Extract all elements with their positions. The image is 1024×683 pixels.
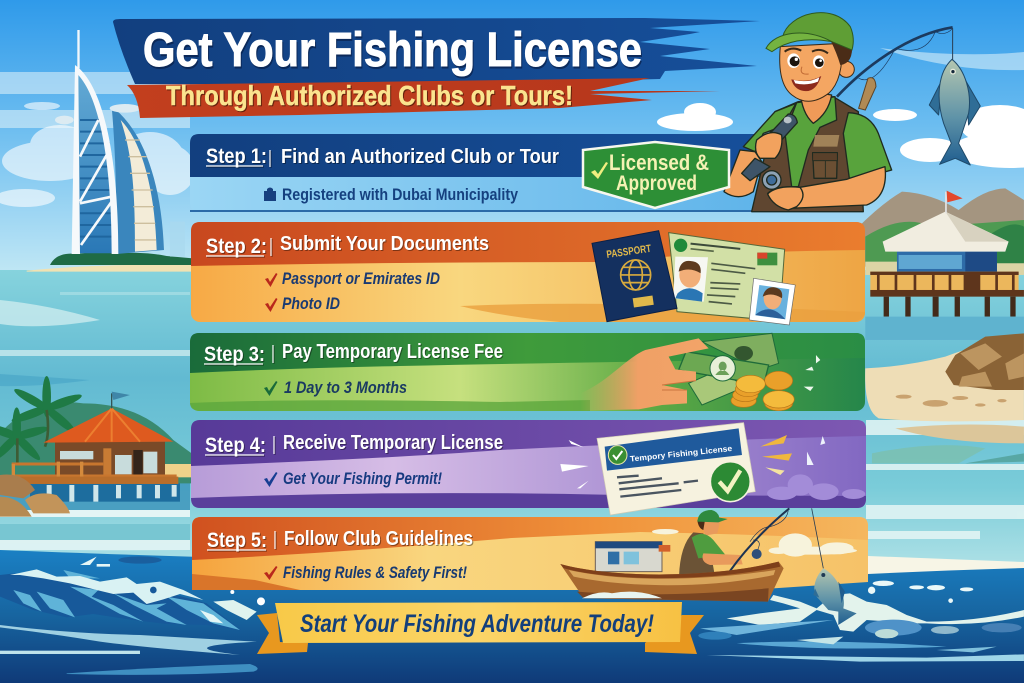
panel: step 3 xyxy=(190,333,865,411)
illustration: waves on left xyxy=(0,543,265,675)
fishing rod xyxy=(837,27,953,110)
small photo xyxy=(749,278,795,325)
panel: step 4 xyxy=(191,420,866,508)
illustration: left pier hut with palms xyxy=(0,376,192,517)
step 2 details: Photo ID xyxy=(282,294,340,313)
hanging fish xyxy=(929,59,980,165)
badge: licensed and approved xyxy=(583,142,729,208)
step 4 heading: Receive Temporary License xyxy=(283,432,503,454)
step 2 heading: Submit Your Documents xyxy=(280,233,489,255)
icon: passport and ID cards xyxy=(592,231,795,325)
background: sky xyxy=(0,0,1024,280)
passport: PASSPORT xyxy=(606,243,652,261)
subtitle: Through Authorized Clubs or Tours! xyxy=(166,80,573,111)
step 2 details xyxy=(265,269,440,313)
panel: step 1 xyxy=(190,134,862,212)
step 5 heading xyxy=(207,528,473,552)
step 3 heading: Step 3: xyxy=(204,343,265,366)
banner: call to action ribbon xyxy=(257,602,704,654)
step 3 heading: Pay Temporary License Fee xyxy=(282,341,503,363)
step 3 heading xyxy=(204,341,503,366)
step 4 heading xyxy=(205,432,503,457)
badge: licensed and approved: Licensed & xyxy=(609,150,709,175)
step 1 heading: Step 1: xyxy=(206,145,267,168)
illustration: fisherman on boat xyxy=(560,508,857,625)
passport xyxy=(592,231,677,322)
step 5 heading: Step 5: xyxy=(207,529,267,552)
icon: hand paying money and coins xyxy=(580,333,820,411)
icon: briefcase xyxy=(264,188,276,201)
background: sea xyxy=(0,270,1024,580)
illustration: right pavilion with mountains xyxy=(859,188,1024,340)
step 3 detail: 1 Day to 3 Months xyxy=(284,378,407,397)
panel: step 5 xyxy=(192,517,868,590)
ID card xyxy=(669,233,785,318)
step 5 heading: Follow Club Guidelines xyxy=(284,528,473,550)
ribbon text: Start Your Fishing Adventure Today! xyxy=(300,610,654,638)
step 4 detail: Get Your Fishing Permit! xyxy=(283,469,442,488)
illustration: fisherman with rod xyxy=(724,13,980,212)
icon: temporary license card: Tempory Fishing License xyxy=(630,444,733,464)
title banner xyxy=(113,18,760,118)
step 1 detail: Registered with Dubai Municipality xyxy=(282,185,518,204)
background: clouds xyxy=(0,102,1024,207)
hooked fish xyxy=(813,568,857,625)
illustration: waves on right xyxy=(698,581,1024,662)
step 4 heading: Step 4: xyxy=(205,434,266,457)
illustration: right beach and rocks xyxy=(865,333,1024,463)
torso and arms xyxy=(724,90,892,212)
panel: step 2 xyxy=(191,222,865,322)
step 1 heading: Find an Authorized Club or Tour xyxy=(281,146,559,168)
step 2 heading xyxy=(206,233,489,258)
head xyxy=(766,13,854,101)
step 2 heading: Step 2: xyxy=(206,235,267,258)
title text: Get Your Fishing License xyxy=(143,24,642,77)
icon: temporary license card xyxy=(560,423,865,515)
badge: licensed and approved: Approved xyxy=(616,172,697,195)
step 5 detail: Fishing Rules & Safety First! xyxy=(283,564,467,582)
illustration: Burj Al Arab tower xyxy=(27,30,192,272)
background: deep water xyxy=(0,550,1024,683)
step 2 details: Passport or Emirates ID xyxy=(282,269,440,288)
